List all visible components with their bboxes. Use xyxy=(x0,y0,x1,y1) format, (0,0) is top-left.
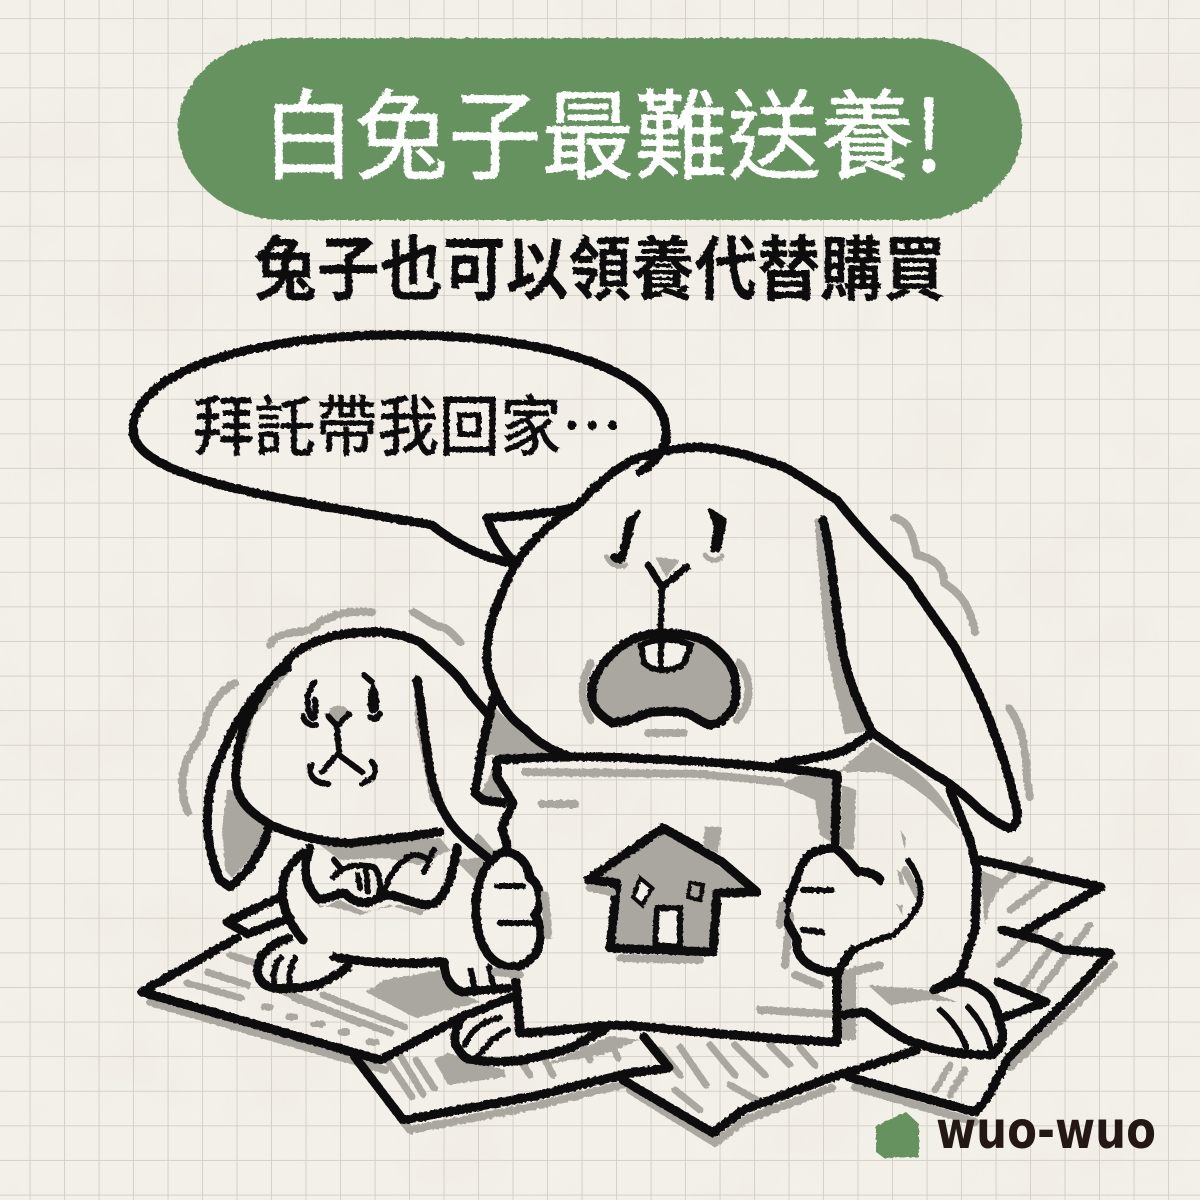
logo house icon xyxy=(876,1112,919,1158)
big rabbit xyxy=(455,447,1030,1065)
big rabbit head and long ear xyxy=(487,447,1017,828)
small rabbit face xyxy=(303,675,380,784)
big rabbit body left edge xyxy=(475,697,503,803)
newspapers on floor xyxy=(142,860,1114,1143)
newspaper shading xyxy=(150,860,1114,1143)
newspaper right xyxy=(849,930,1110,1112)
small rabbit xyxy=(183,612,508,992)
big rabbit face xyxy=(592,510,736,725)
title text: 白兔子最難送養! xyxy=(262,58,944,200)
small rabbit crossed paws and body xyxy=(282,848,457,940)
big rabbit mouth xyxy=(592,633,736,725)
small rabbit feet xyxy=(257,938,508,992)
left hand xyxy=(476,852,548,975)
title banner xyxy=(178,38,1022,220)
subtitle: 兔子也可以領養代替購買 xyxy=(254,214,946,315)
sign outline xyxy=(497,757,837,1042)
small rabbit head and ears xyxy=(236,632,487,843)
speech text: 拜託帶我回家… xyxy=(193,374,623,470)
big rabbit right arm xyxy=(935,790,977,990)
sign with house xyxy=(476,757,880,1042)
newspaper left xyxy=(142,897,462,1060)
speech bubble xyxy=(133,335,666,564)
big rabbit feet xyxy=(455,982,1003,1062)
newspaper bottom xyxy=(355,1037,669,1120)
small rabbit shadows xyxy=(183,612,490,915)
right hand xyxy=(780,848,880,985)
logo xyxy=(876,1101,1156,1161)
logo wordmark: wuo-wuo xyxy=(936,1101,1156,1161)
house icon xyxy=(588,827,757,960)
big rabbit shadows xyxy=(480,518,1030,1065)
